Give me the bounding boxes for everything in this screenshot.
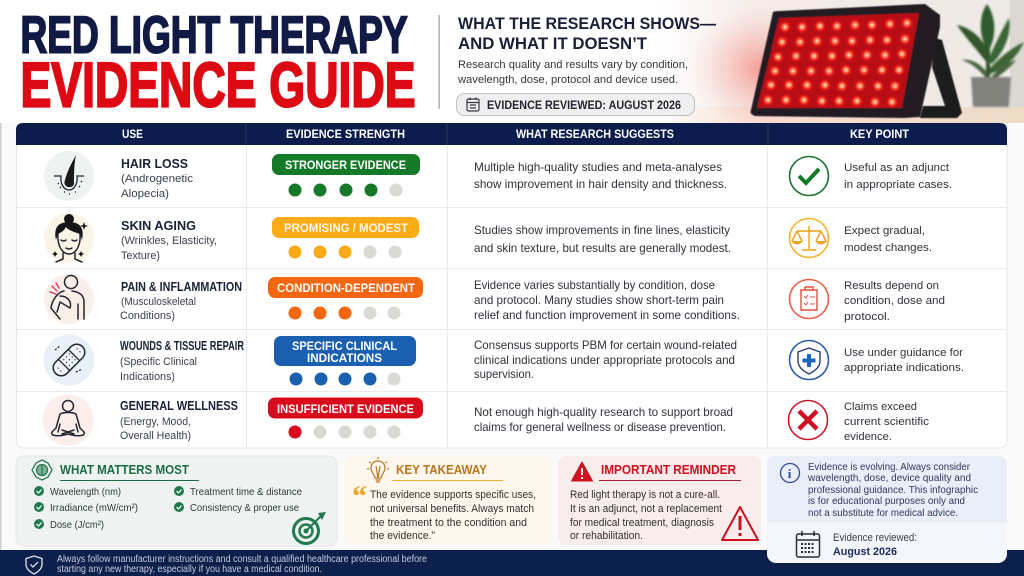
key point: pain: Results depend on <box>844 280 939 292</box>
table header bar: KEY POINT <box>850 129 909 141</box>
takeaway text: the evidence.” <box>370 530 435 542</box>
panel: what matters most <box>16 456 337 546</box>
note text: Evidence is evolving. Always consider <box>808 462 971 473</box>
icon: info <box>780 464 800 482</box>
panel: important reminder <box>558 456 761 545</box>
evidence dots: 4 of 5 blue <box>290 372 400 386</box>
evidence badge: stronger evidence <box>272 154 420 175</box>
note text <box>807 462 978 519</box>
research text: skin aging <box>474 224 731 255</box>
header background and device photo <box>0 0 1024 130</box>
icon: light bulb <box>367 457 389 482</box>
use label: hair loss: HAIR LOSS <box>121 157 188 171</box>
use label: wounds: (Specific Clinical <box>120 356 197 368</box>
key point: wellness <box>844 401 929 443</box>
evidence reviewed pill: EVIDENCE REVIEWED: AUGUST 2026 <box>487 100 681 112</box>
panel: evidence note <box>767 456 1007 563</box>
row: hair loss <box>44 151 952 201</box>
use label: pain and inflammation: Conditions) <box>120 310 175 322</box>
use label: hair loss: (Androgenetic <box>121 173 193 185</box>
research text: pain <box>474 279 740 322</box>
icon: filled warning triangle <box>572 462 592 481</box>
icon: bandage <box>44 334 94 386</box>
use label: skin aging <box>121 219 217 262</box>
footer disclaimer text: starting any new therapy, especially if you have a medical condition. <box>57 564 322 575</box>
checklist: Consistency & proper use <box>190 503 299 514</box>
key point: pain: protocol. <box>844 311 890 323</box>
subtitle: WHAT THE RESEARCH SHOWS— <box>458 15 716 33</box>
key point: hair loss <box>844 162 952 191</box>
intro text <box>457 59 688 86</box>
key point: wellness: Claims exceed <box>844 401 917 413</box>
reminder text: or rehabilitation. <box>570 530 643 542</box>
research text: hair loss: show improvement in hair density and thickness. <box>474 178 727 191</box>
research text: skin aging: Studies show improvements in fine lines, elasticity <box>474 224 730 237</box>
reminder text <box>570 489 722 542</box>
reminder text: for medical treatment, diagnosis <box>570 517 714 529</box>
subtitle <box>458 15 716 53</box>
takeaway text <box>370 489 536 542</box>
takeaway text: The evidence supports specific uses, <box>370 489 536 501</box>
icon: target <box>294 512 326 544</box>
evidence badge: promising modest <box>272 217 419 238</box>
icon: shield plus <box>790 340 828 380</box>
key point: hair loss: Useful as an adjunct <box>844 162 950 174</box>
heading: key takeaway: KEY TAKEAWAY <box>396 462 487 477</box>
research text: wounds: Consensus supports PBM for certain wound-related <box>474 339 737 352</box>
evidence badge: condition dependent <box>268 277 423 298</box>
row: general wellness <box>42 394 929 446</box>
research text: hair loss: Multiple high-quality studies and meta-analyses <box>474 161 722 174</box>
key point: skin aging: Expect gradual, <box>844 225 925 237</box>
use label: skin aging: Texture) <box>121 250 160 262</box>
evidence badge: insufficient evidence: INSUFFICIENT EVIDENCE <box>277 404 414 416</box>
research text: wellness: Not enough high-quality research to support broad <box>474 406 733 419</box>
table background <box>16 140 1007 448</box>
panel: key takeaway <box>345 456 552 545</box>
table header bar: USE <box>122 129 143 141</box>
icon: red cross <box>788 400 828 440</box>
checklist: Irradiance (mW/cm²) <box>50 503 138 514</box>
evidence dots: 4 of 5 <box>288 184 402 196</box>
subtitle: AND WHAT IT DOESN’T <box>458 35 647 53</box>
use label: general wellness <box>120 399 238 442</box>
use label: wounds: Indications) <box>120 371 175 383</box>
evidence badge: specific clinical indications: INDICATIONS <box>307 353 382 365</box>
heading: important reminder: IMPORTANT REMINDER <box>601 462 737 477</box>
key point: wounds: Use under guidance for <box>844 347 963 359</box>
checklist: Treatment time & distance <box>190 487 302 498</box>
footer disclaimer text: Always follow manufacturer instructions and consult a qualified healthcare professional before <box>57 554 427 565</box>
key point: skin aging <box>844 225 932 254</box>
evidence badge: insufficient evidence <box>268 398 423 418</box>
research text: wounds <box>474 339 737 381</box>
research text: skin aging: and skin texture, but results are generally modest. <box>474 242 731 255</box>
evidence badge: specific clinical indications <box>274 336 416 366</box>
key point: pain: condition, dose and <box>844 295 945 307</box>
evidence badge: promising modest: PROMISING / MODEST <box>284 223 408 235</box>
note text: not a substitute for medical advice. <box>808 508 958 519</box>
evidence badge: condition dependent: CONDITION-DEPENDENT <box>277 283 415 295</box>
quote mark: “ <box>352 480 367 513</box>
research text: wellness <box>474 406 733 434</box>
use label: hair loss <box>121 157 193 200</box>
note text: professional guidance. This infographic <box>808 485 978 496</box>
table header bar: WHAT RESEARCH SUGGESTS <box>516 129 674 141</box>
use label: skin aging: SKIN AGING <box>121 219 196 233</box>
research text: pain: and protocol. Many studies show short-term pain <box>474 294 724 307</box>
checklist: Dose (J/cm²) <box>50 520 104 531</box>
evidence reviewed date: August 2026 <box>833 546 897 558</box>
takeaway text: the treatment to the condition and <box>370 517 527 529</box>
icon: outlined warning triangle <box>722 507 758 540</box>
icon: leaf badge <box>32 460 52 480</box>
intro text: wavelength, dose, protocol and device used. <box>457 74 678 86</box>
title: RED LIGHT THERAPY <box>20 6 407 64</box>
heading: what matters most: WHAT MATTERS MOST <box>60 462 189 477</box>
use label: wounds: WOUNDS & TISSUE REPAIR <box>120 339 244 353</box>
illustration: red light panel device <box>750 4 962 118</box>
row: wounds and tissue repair <box>44 334 964 386</box>
key point: wellness: current scientific <box>844 416 929 428</box>
title <box>20 6 416 120</box>
use label: pain and inflammation: (Musculoskeletal <box>121 296 196 308</box>
table header bar: EVIDENCE STRENGTH <box>286 129 405 141</box>
icon: calendar <box>467 98 479 111</box>
evidence badge: specific clinical indications: SPECIFIC CLINICAL <box>292 341 397 353</box>
icon: meditation <box>42 394 94 446</box>
key point: wounds: appropriate indications. <box>844 362 964 374</box>
use label: pain and inflammation <box>120 280 242 322</box>
row: pain and inflammation <box>44 274 945 324</box>
use label: skin aging: (Wrinkles, Elasticity, <box>121 235 217 247</box>
checklist <box>34 486 302 531</box>
key point: pain <box>844 280 945 323</box>
icon: face <box>44 213 94 263</box>
research text: pain: relief and function improvement in some conditions. <box>474 309 740 322</box>
research text: pain: Evidence varies substantially by condition, dose <box>474 279 715 292</box>
evidence reviewed date: Evidence reviewed: <box>833 532 917 544</box>
row: skin aging <box>44 213 932 263</box>
footer disclaimer text <box>57 554 427 575</box>
icon: green check <box>790 156 828 196</box>
icon: info: i <box>788 466 792 481</box>
intro text: Research quality and results vary by condition, <box>458 59 688 71</box>
icon: shoulder pain <box>44 274 94 324</box>
icon: hair follicle <box>44 151 94 201</box>
key point: hair loss: in appropriate cases. <box>844 179 952 191</box>
icon: clipboard <box>790 280 828 318</box>
footer bar <box>0 550 1024 576</box>
use label: general wellness: GENERAL WELLNESS <box>120 399 238 413</box>
evidence badge: stronger evidence: STRONGER EVIDENCE <box>285 160 406 172</box>
use label: general wellness: Overall Health) <box>120 430 191 442</box>
key point: skin aging: modest changes. <box>844 242 932 254</box>
use label: general wellness: (Energy, Mood, <box>120 416 191 428</box>
evidence dots: 3 of 5 orange <box>288 306 400 320</box>
key point: wounds <box>844 347 964 374</box>
reminder text: It is an adjunct, not a replacement <box>570 503 722 515</box>
evidence reviewed date <box>833 532 917 558</box>
note text: is for educational purposes only and <box>808 496 965 507</box>
key point: wellness: evidence. <box>844 431 892 443</box>
research text: wounds: clinical indications under appropriate protocols and <box>474 354 735 367</box>
evidence reviewed pill <box>456 94 694 116</box>
icon: large calendar <box>796 531 820 557</box>
title: EVIDENCE GUIDE <box>20 50 416 120</box>
note text: wavelength, dose, device quality and <box>807 473 971 484</box>
takeaway text: not universal benefits. Always match <box>370 503 534 515</box>
table header bar <box>16 123 1007 145</box>
reminder text: Red light therapy is not a cure-all. <box>570 489 720 501</box>
research text: wounds: supervision. <box>474 368 534 381</box>
checklist: Wavelength (nm) <box>50 487 121 498</box>
use label: hair loss: Alopecia) <box>121 188 169 200</box>
research text: wellness: claims for general wellness or disease prevention. <box>474 421 726 434</box>
use label: wounds <box>120 339 244 383</box>
research text: hair loss <box>474 161 727 191</box>
icon: footer shield <box>26 556 42 574</box>
evidence dots: 3 of 5 <box>288 246 402 258</box>
evidence dots: 1 of 5 <box>288 426 400 438</box>
icon: scales <box>790 218 828 258</box>
icon: potted plant <box>957 4 1024 107</box>
use label: pain and inflammation: PAIN & INFLAMMATION <box>121 280 242 294</box>
